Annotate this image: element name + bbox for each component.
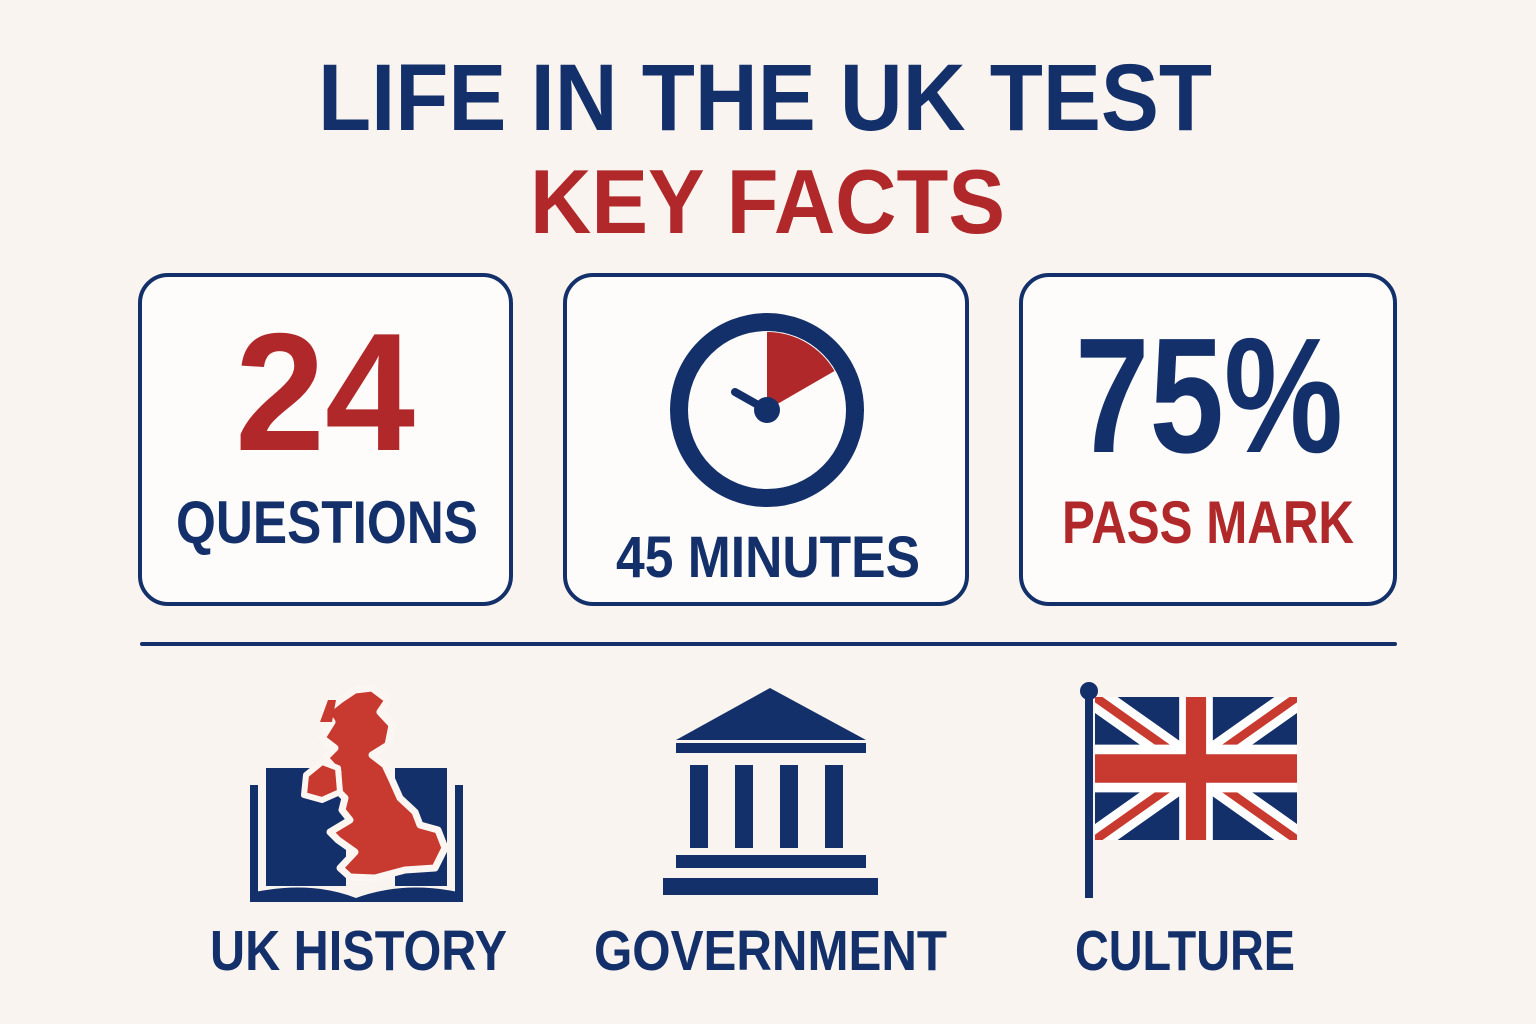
icon: book with UK map bbox=[250, 688, 463, 902]
panel: minutes bbox=[565, 275, 967, 604]
label: government: GOVERNMENT bbox=[594, 919, 947, 983]
icon: clock bbox=[679, 322, 855, 498]
label: culture: CULTURE bbox=[1075, 919, 1295, 983]
icon: government building bbox=[663, 688, 878, 895]
title: LIFE IN THE UK TEST bbox=[318, 45, 1212, 151]
label 45 minutes: 45 MINUTES bbox=[616, 525, 920, 590]
number 24: 24 bbox=[235, 298, 415, 486]
label pass mark: PASS MARK bbox=[1062, 489, 1354, 556]
icon: union jack flag bbox=[1080, 682, 1297, 898]
label: uk history: UK HISTORY bbox=[210, 919, 507, 983]
panel: pass mark bbox=[1021, 275, 1395, 604]
subtitle: key facts: KEY FACTS bbox=[530, 152, 1005, 253]
panel: questions bbox=[140, 275, 511, 604]
number 75%: 75% bbox=[1075, 304, 1343, 487]
label questions: QUESTIONS bbox=[176, 489, 478, 556]
